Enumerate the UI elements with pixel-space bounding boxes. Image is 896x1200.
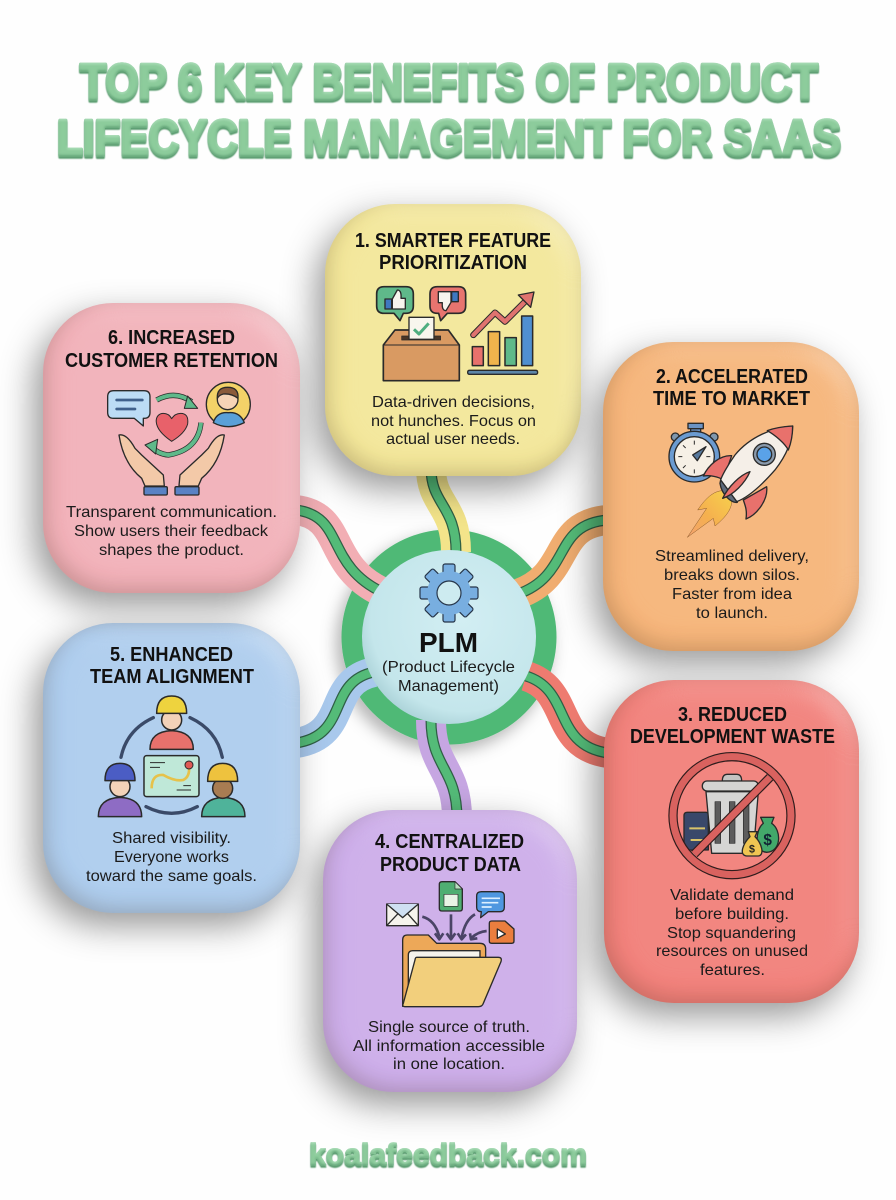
description <box>86 830 257 885</box>
description <box>66 504 277 559</box>
icon: team around shared roadmap <box>98 696 245 817</box>
description: to launch. <box>696 605 768 622</box>
heading <box>65 327 278 372</box>
description: All information accessible <box>353 1038 545 1055</box>
panel: 4 centralized product data <box>323 810 577 1092</box>
description: Stop squandering <box>667 925 796 942</box>
heading: 5. ENHANCED <box>110 644 233 666</box>
heading <box>375 831 524 876</box>
connector: card 1 <box>431 468 456 552</box>
heading <box>355 230 551 274</box>
heading: CUSTOMER RETENTION <box>65 350 278 372</box>
heading: 1. SMARTER FEATURE <box>355 230 551 252</box>
description: Everyone works <box>114 849 229 866</box>
description: not hunches. Focus on <box>371 413 536 430</box>
description: Data-driven decisions, <box>372 394 535 411</box>
panel: 3 reduced development waste <box>604 680 859 1003</box>
description: Show users their feedback <box>74 523 269 540</box>
heading: TIME TO MARKET <box>653 388 810 410</box>
panel: 5 enhanced team alignment <box>43 623 300 913</box>
description: Shared visibility. <box>112 830 231 847</box>
icon: votes and growth chart <box>377 287 538 381</box>
heading: PRIORITIZATION <box>379 252 527 274</box>
description: in one location. <box>393 1056 505 1073</box>
icon: feedback loop, heart and caring hands <box>108 382 250 495</box>
description: Streamlined delivery, <box>655 548 809 565</box>
description: Transparent communication. <box>66 504 277 521</box>
icon: prohibited trash, code and money <box>673 757 791 875</box>
description <box>353 1019 545 1073</box>
heading <box>653 366 810 410</box>
connector: card 4 <box>431 720 457 818</box>
icon: gear <box>420 564 478 622</box>
hub subtitle: Management) <box>398 678 499 695</box>
connector: card 6 <box>296 510 382 592</box>
description: breaks down silos. <box>664 567 800 584</box>
heading: DEVELOPMENT WASTE <box>630 726 835 748</box>
hub subtitle: (Product Lifecycle <box>382 659 515 676</box>
description <box>656 887 808 979</box>
heading: 4. CENTRALIZED <box>375 831 524 853</box>
description: toward the same goals. <box>86 868 257 885</box>
panel: 1 smarter feature prioritization <box>325 204 581 476</box>
description: resources on unused <box>656 943 808 960</box>
heading: 3. REDUCED <box>678 704 787 726</box>
icon: stopwatch and rocket <box>669 423 793 537</box>
connector: card 3 <box>526 676 608 753</box>
heading: 6. INCREASED <box>108 327 235 349</box>
connectors <box>296 468 608 818</box>
description <box>371 394 536 448</box>
connector: card 5 <box>296 672 374 743</box>
description <box>655 548 809 622</box>
panel: 6 increased customer retention <box>43 303 300 593</box>
description: before building. <box>675 906 789 923</box>
description: actual user needs. <box>386 431 520 448</box>
hub subtitle <box>382 659 515 695</box>
heading <box>630 704 835 748</box>
heading <box>90 644 254 688</box>
title <box>57 54 841 166</box>
heading: TEAM ALIGNMENT <box>90 666 254 688</box>
description: shapes the product. <box>99 542 244 559</box>
connector: card 2 <box>518 520 608 594</box>
heading: 2. ACCELERATED <box>656 366 808 388</box>
footer website: koalafeedback.com <box>309 1137 587 1172</box>
heading: PRODUCT DATA <box>380 854 521 876</box>
description: features. <box>700 962 765 979</box>
central hub ring <box>352 540 546 734</box>
panel: 2 accelerated time to market <box>603 342 859 651</box>
icon: prohibited trash, code and money: $ <box>763 832 772 849</box>
hub label: PLM <box>419 627 478 658</box>
description: Faster from idea <box>672 586 792 603</box>
central hub: PLM <box>362 550 536 724</box>
description: Validate demand <box>670 887 794 904</box>
icon: prohibited trash, code and money: $ <box>749 844 755 856</box>
icon: files flowing into folder <box>387 882 514 1007</box>
description: Single source of truth. <box>368 1019 530 1036</box>
